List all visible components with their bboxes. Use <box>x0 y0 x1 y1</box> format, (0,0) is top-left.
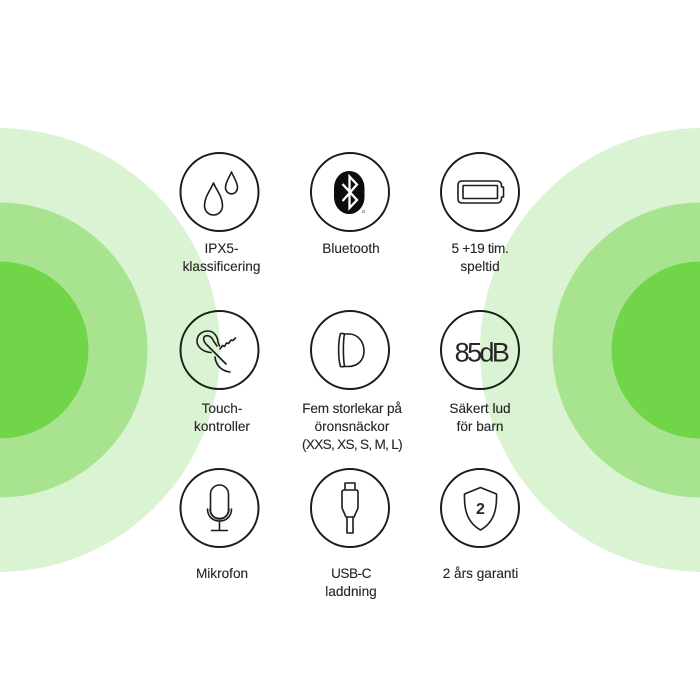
feature: Bluetooth <box>311 153 389 256</box>
label: Fem storlekar: (XXS, XS, S, M, L) <box>302 437 402 452</box>
concentric circles right <box>480 128 700 572</box>
feature: microphone <box>180 469 258 581</box>
concentric circles left <box>0 128 220 572</box>
icon: water drops <box>204 172 238 215</box>
label: USB-C laddning: USB-C <box>331 566 371 581</box>
icon: USB-C cable <box>342 483 358 533</box>
label: USB-C laddning: laddning <box>325 584 377 599</box>
label: Fem storlekar: öronsnäckor <box>315 419 390 434</box>
label: 2 års garanti: 2 års garanti <box>443 566 518 581</box>
icon: touch earbud <box>197 331 236 372</box>
feature: USB-C <box>311 469 389 599</box>
feature: battery <box>441 153 519 274</box>
feature: ear tips <box>302 311 402 452</box>
label: speltid: 5 +19 tim. <box>451 241 509 256</box>
label: Säkert lud: för barn <box>457 419 503 434</box>
icon: shield: 2 <box>476 501 485 518</box>
icon: 85dB: 85dB <box>455 338 509 368</box>
label: Bluetooth: Bluetooth <box>322 241 380 256</box>
label: IPX5-klassificering: IPX5- <box>204 241 238 256</box>
label: Touch-kontroller: Touch- <box>202 401 242 416</box>
icon: battery <box>458 181 504 203</box>
icon: ear tip <box>339 333 364 367</box>
label: Säkert lud: Säkert lud <box>449 401 511 416</box>
label: Mikrofon: Mikrofon <box>196 566 248 581</box>
icon: microphone <box>208 485 232 530</box>
label: speltid: speltid <box>460 259 500 274</box>
label: IPX5-klassificering: klassificering <box>183 259 260 274</box>
feature: warranty <box>441 469 519 581</box>
label: Touch-kontroller: kontroller <box>194 419 250 434</box>
icon: bluetooth <box>334 171 365 214</box>
feature: touch controls <box>180 311 258 434</box>
feature: IPX5 <box>180 153 260 274</box>
feature: 85dB <box>441 311 519 434</box>
label: Fem storlekar: Fem storlekar på <box>302 401 402 416</box>
